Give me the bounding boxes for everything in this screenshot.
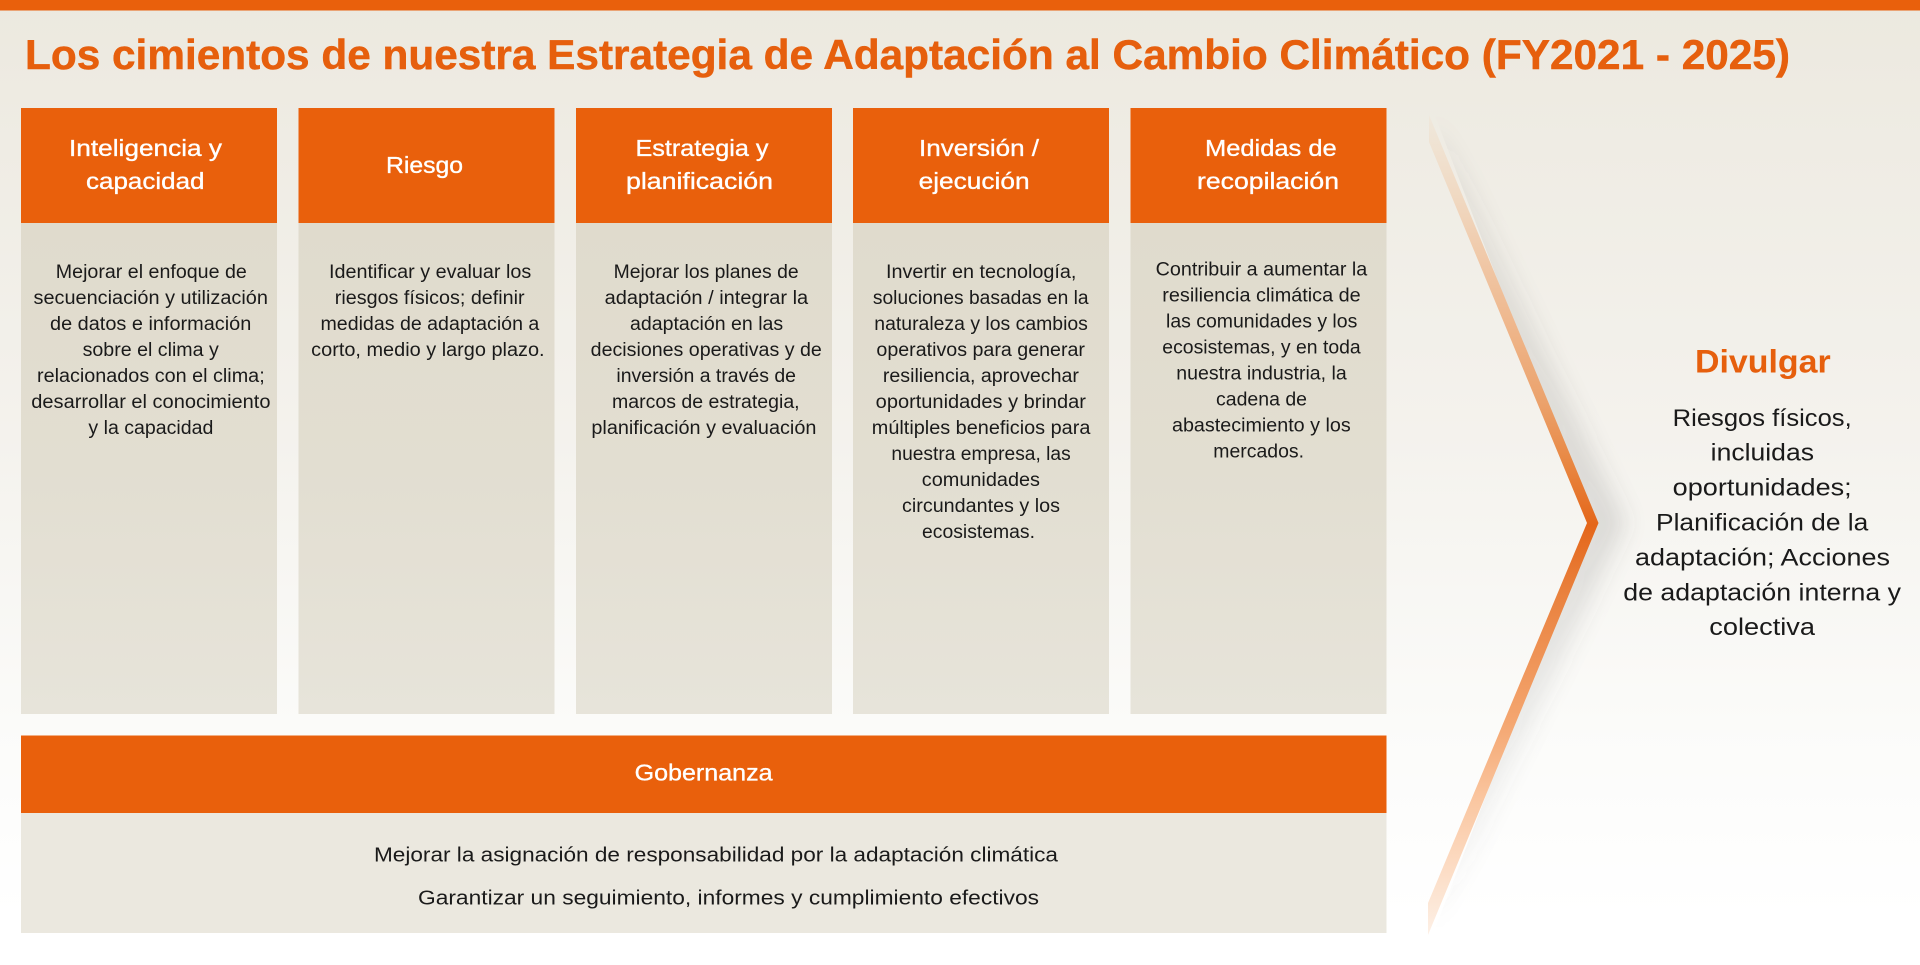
heading: Inteligencia y: [69, 135, 222, 161]
text block: [1156, 260, 1368, 462]
text block: circundantes y los: [902, 496, 1060, 517]
heading: Medidas de: [1205, 135, 1337, 161]
text block: oportunidades y brindar: [876, 392, 1087, 413]
body background: [298, 223, 554, 714]
text block: [374, 844, 1059, 910]
text block: Mejorar la asignación de responsabilidad por la adaptación climática: [374, 844, 1059, 866]
text block: planificación y evaluación: [591, 418, 816, 439]
text block: resiliencia climática de: [1162, 286, 1361, 306]
heading: planificación: [626, 168, 773, 194]
text block: operativos para generar: [876, 340, 1086, 361]
heading: [1197, 135, 1339, 194]
text block: ecosistemas.: [922, 522, 1035, 543]
heading: [69, 135, 222, 194]
text block: medidas de adaptación a: [320, 314, 540, 335]
text block: desarrollar el conocimiento: [31, 392, 270, 413]
text block: las comunidades y los: [1166, 312, 1357, 332]
text block: riesgos físicos; definir: [335, 288, 525, 309]
header block: [298, 108, 554, 223]
text block: nuestra empresa, las: [891, 444, 1071, 465]
body background: [576, 223, 832, 714]
heading: Riesgo: [386, 152, 463, 178]
body background: [1130, 223, 1386, 714]
text block: colectiva: [1709, 614, 1815, 641]
body background: [21, 813, 1386, 933]
text block: inversión a través de: [616, 366, 796, 387]
text block: Mejorar el enfoque de: [56, 262, 247, 283]
panel: Divulgar: [1623, 344, 1902, 641]
body background: [853, 223, 1109, 714]
text block: Garantizar un seguimiento, informes y cumplimiento efectivos: [418, 886, 1039, 910]
text block: Invertir en tecnología,: [886, 262, 1076, 283]
heading: Inversión /: [919, 135, 1040, 161]
chevron shape: [1428, 115, 1598, 935]
panel: Inversión / ejecución: [853, 108, 1109, 714]
text block: marcos de estrategia,: [612, 392, 800, 413]
text block: de adaptación interna y: [1623, 580, 1902, 607]
heading: [919, 135, 1040, 194]
body background: [21, 223, 277, 714]
text block: Riesgos físicos,: [1673, 405, 1852, 432]
text block: oportunidades;: [1673, 475, 1852, 502]
heading: ejecución: [919, 168, 1030, 194]
text block: adaptación / integrar la: [605, 288, 809, 309]
header block: [21, 108, 277, 223]
header block: [853, 108, 1109, 223]
text block: cadena de: [1216, 390, 1307, 410]
text block: nuestra industria, la: [1176, 364, 1347, 384]
text block: sobre el clima y: [83, 340, 219, 361]
text block: de datos e información: [50, 314, 251, 335]
text block: [591, 262, 822, 439]
chevron shadow: [1458, 176, 1628, 830]
heading: recopilación: [1197, 168, 1339, 194]
top bar: [0, 0, 1920, 10]
text block: incluidas: [1711, 440, 1814, 467]
text block: Identificar y evaluar los: [329, 262, 531, 283]
text block: ecosistemas, y en toda: [1162, 338, 1361, 358]
text block: naturaleza y los cambios: [874, 314, 1088, 335]
heading: capacidad: [86, 168, 204, 194]
text block: adaptación; Acciones: [1635, 545, 1890, 572]
panel: Gobernanza: [21, 736, 1386, 933]
text block: mercados.: [1213, 442, 1304, 462]
panel: Medidas de recopilación: [1130, 108, 1386, 714]
header block: [1130, 108, 1386, 223]
text block: decisiones operativas y de: [591, 340, 822, 361]
arrow: chevron: [1428, 115, 1626, 935]
text block: soluciones basadas en la: [873, 288, 1089, 309]
panel: Riesgo: [298, 108, 554, 714]
panel: Inteligencia y capacidad: [21, 108, 277, 714]
heading: [626, 135, 773, 194]
text block: resiliencia, aprovechar: [883, 366, 1080, 387]
text block: Contribuir a aumentar la: [1156, 260, 1368, 280]
text block: múltiples beneficios para: [872, 418, 1091, 439]
text block: [1623, 405, 1902, 641]
text block: Mejorar los planes de: [614, 262, 799, 283]
heading: Gobernanza: [635, 760, 774, 786]
text block: secuenciación y utilización: [34, 288, 268, 309]
text block: comunidades: [922, 470, 1040, 491]
text block: [311, 262, 545, 361]
text block: Planificación de la: [1656, 510, 1869, 537]
header block: [576, 108, 832, 223]
panel: Estrategia y planificación: [576, 108, 832, 714]
text block: [872, 262, 1091, 543]
title: Los cimientos de nuestra Estrategia de Adaptación al Cambio Climático (FY2021 - 2025): [25, 31, 1790, 78]
heading: Estrategia y: [636, 135, 769, 161]
text block: corto, medio y largo plazo.: [311, 340, 545, 361]
text block: adaptación en las: [630, 314, 783, 335]
text block: abastecimiento y los: [1172, 416, 1351, 436]
heading: Divulgar: [1695, 344, 1831, 380]
text block: [31, 262, 270, 439]
text block: y la capacidad: [88, 418, 213, 439]
header block: [21, 736, 1386, 813]
text block: relacionados con el clima;: [37, 366, 265, 387]
